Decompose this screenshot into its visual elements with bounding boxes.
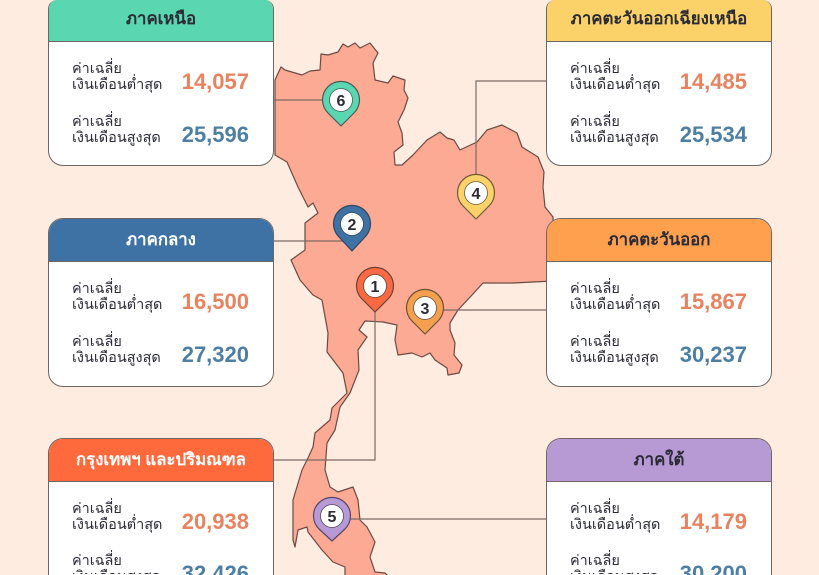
- heading: bangkok: [49, 439, 273, 482]
- pin 6: [323, 81, 360, 126]
- value: central minimum: 16,500: [182, 289, 249, 314]
- label: east maximum: [570, 331, 659, 366]
- label: central minimum: ค่าเฉลี่ย: [72, 281, 122, 297]
- label: north minimum: เงินเดือนต่ำสุด: [72, 77, 162, 93]
- heading: south: ภาคใต้: [634, 450, 684, 469]
- label: central maximum: เงินเดือนสูงสุด: [72, 350, 161, 366]
- map of thailand: [275, 43, 553, 575]
- value: northeast maximum: 25,534: [680, 122, 747, 147]
- leader lines: [273, 81, 546, 519]
- value: north maximum: 25,596: [182, 122, 249, 147]
- value: northeast minimum: 14,485: [680, 69, 747, 94]
- label: central minimum: [72, 278, 162, 313]
- label: south maximum: [570, 550, 659, 574]
- label: bangkok minimum: ค่าเฉลี่ย: [72, 501, 122, 517]
- label: east maximum: เงินเดือนสูงสุด: [570, 350, 659, 366]
- value: south minimum: 14,179: [680, 509, 747, 534]
- heading: central: [49, 219, 273, 262]
- label: south minimum: ค่าเฉลี่ย: [570, 501, 620, 517]
- heading: east: ภาคตะวันออก: [608, 230, 710, 249]
- pin 3: 3: [421, 301, 430, 318]
- label: north maximum: [72, 111, 161, 146]
- panel: east: [546, 218, 772, 387]
- pin 5: 5: [328, 509, 337, 526]
- label: northeast minimum: [570, 58, 660, 93]
- heading: east: [547, 219, 771, 262]
- pin 6: 6: [337, 93, 346, 110]
- label: northeast maximum: เงินเดือนสูงสุด: [570, 130, 659, 146]
- label: east minimum: ค่าเฉลี่ย: [570, 281, 620, 297]
- heading: bangkok: กรุงเทพฯ และปริมณฑล: [76, 450, 246, 469]
- panel: bangkok and vicinity: [48, 438, 274, 575]
- label: east minimum: เงินเดือนต่ำสุด: [570, 297, 660, 313]
- heading: central: ภาคกลาง: [126, 230, 196, 249]
- label: northeast minimum: ค่าเฉลี่ย: [570, 61, 620, 77]
- pin 5: [314, 497, 350, 541]
- pin 2: 2: [348, 217, 357, 234]
- label: east maximum: ค่าเฉลี่ย: [570, 334, 620, 350]
- heading: northeast: ภาคตะวันออกเฉียงเหนือ: [571, 9, 747, 28]
- panel: northeast: [546, 0, 772, 166]
- label: central minimum: เงินเดือนต่ำสุด: [72, 297, 162, 313]
- label: east minimum: [570, 278, 660, 313]
- label: north minimum: ค่าเฉลี่ย: [72, 61, 122, 77]
- label: bangkok minimum: เงินเดือนต่ำสุด: [72, 517, 162, 533]
- pin 4: 4: [472, 186, 481, 203]
- heading: north: ภาคเหนือ: [126, 9, 196, 28]
- value: east maximum: 30,237: [680, 342, 747, 367]
- label: northeast maximum: ค่าเฉลี่ย: [570, 114, 620, 130]
- label: north minimum: [72, 58, 162, 93]
- heading: south: [547, 439, 771, 482]
- label: south maximum: ค่าเฉลี่ย: [570, 553, 620, 569]
- pin 4: [458, 174, 494, 219]
- pin 2: [334, 205, 370, 251]
- label: south minimum: เงินเดือนต่ำสุด: [570, 517, 660, 533]
- value: bangkok minimum: 20,938: [182, 509, 249, 534]
- pin 1: 1: [371, 279, 380, 296]
- panel: north: [48, 0, 274, 166]
- panel: south: [546, 438, 772, 575]
- label: bangkok maximum: [72, 550, 161, 574]
- heading: northeast: [547, 0, 771, 42]
- label: central maximum: ค่าเฉลี่ย: [72, 334, 122, 350]
- label: northeast maximum: [570, 111, 659, 146]
- panel: central: [48, 218, 274, 387]
- label: bangkok minimum: [72, 498, 162, 533]
- value: north minimum: 14,057: [182, 69, 249, 94]
- heading: north: [49, 0, 273, 42]
- label: north maximum: ค่าเฉลี่ย: [72, 114, 122, 130]
- label: south minimum: [570, 498, 660, 533]
- label: north maximum: เงินเดือนสูงสุด: [72, 130, 161, 146]
- label: bangkok maximum: ค่าเฉลี่ย: [72, 553, 122, 569]
- pin 1: [357, 267, 394, 312]
- pin 3: [406, 289, 444, 334]
- value: east minimum: 15,867: [680, 289, 747, 314]
- label: central maximum: [72, 331, 161, 366]
- label: northeast minimum: เงินเดือนต่ำสุด: [570, 77, 660, 93]
- value: central maximum: 27,320: [182, 342, 249, 367]
